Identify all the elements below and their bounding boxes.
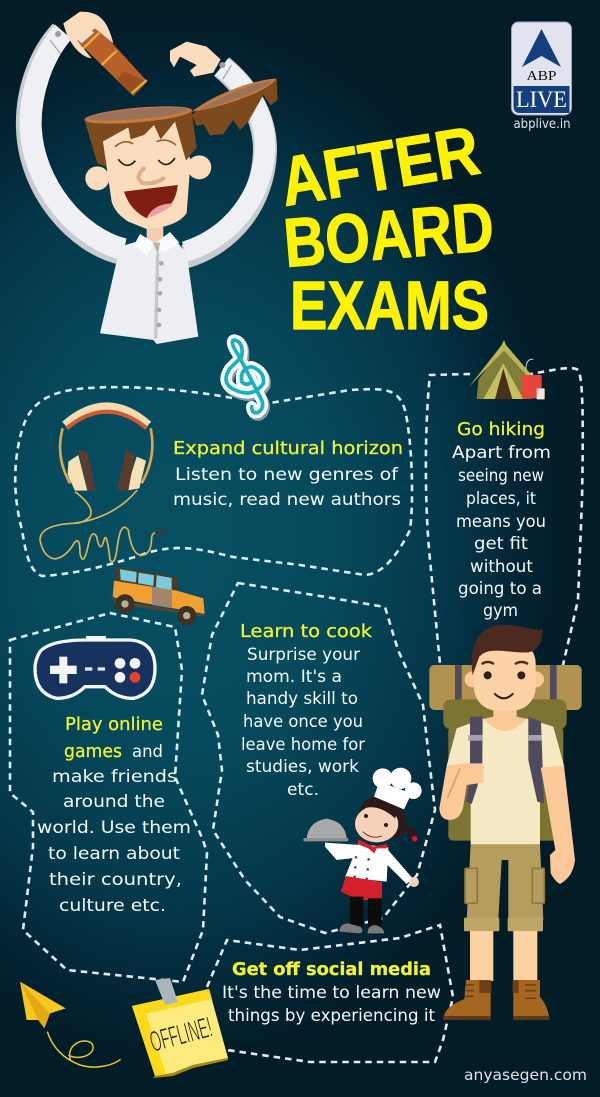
title: After Board Exams: AFTER	[275, 112, 485, 221]
text: learn to cook: Surprise your	[247, 645, 360, 664]
icon: tent with red bag	[468, 340, 545, 399]
dashed outline: online games panel	[10, 613, 207, 982]
book	[76, 27, 147, 96]
text: play online games: to learn about	[48, 844, 181, 863]
icon: headphones with cable	[40, 407, 167, 562]
text: play online games: Play online	[65, 715, 163, 735]
text: learn to cook: Learn to cook	[240, 622, 373, 642]
logo: ABP Live: LIVE	[516, 87, 567, 112]
hair flap	[192, 79, 278, 135]
text: expand cultural horizon: music, read new authors	[173, 490, 401, 509]
ears and head	[465, 671, 481, 687]
icon: paper plane with trail	[20, 982, 121, 1067]
sticky note: offline: OFFLINE!	[147, 1012, 216, 1059]
text: go hiking: without	[470, 557, 534, 576]
text: go hiking: means you	[456, 512, 546, 531]
title: After Board Exams: EXAMS	[290, 267, 489, 344]
eyebrows	[115, 140, 176, 147]
icon: treble clef	[226, 340, 265, 415]
text: learn to cook	[240, 622, 373, 799]
text: learn to cook: etc.	[287, 780, 319, 799]
chef hat	[373, 768, 422, 809]
text: learn to cook: studies, work	[246, 757, 359, 776]
cuffs	[55, 31, 61, 37]
arms	[28, 32, 265, 257]
arms	[439, 763, 484, 820]
shorts	[467, 844, 543, 920]
right hand	[170, 42, 221, 77]
nose	[138, 168, 163, 183]
text: get off social media: Get off social media	[232, 960, 431, 980]
text: expand cultural horizon	[173, 439, 403, 509]
illustration: man pouring book into open head	[28, 12, 278, 344]
text: play online games	[37, 715, 191, 915]
title: After Board Exams: BOARD	[281, 188, 497, 282]
face	[102, 120, 191, 229]
hair	[85, 109, 197, 167]
cloche	[307, 819, 347, 838]
credit: anyasegen.com: anyasegen.com	[464, 1066, 587, 1084]
shirt	[447, 718, 564, 845]
text: go hiking: seeing new	[458, 466, 544, 485]
logo: ABP Live	[512, 22, 572, 132]
hand holding book	[63, 12, 113, 58]
text: get off social media: things by experiencing it	[228, 1006, 436, 1025]
text: play online games: games	[64, 742, 122, 762]
text: learn to cook: have once you	[243, 712, 363, 731]
dashed outline: cultural horizon panel	[15, 387, 412, 576]
ears	[85, 166, 109, 190]
legs	[470, 931, 493, 981]
icon: game controller	[35, 636, 155, 698]
text: play online games: and	[132, 742, 163, 761]
dashed outline: social media panel	[207, 925, 453, 1062]
neck	[147, 223, 163, 243]
text: learn to cook: mom. It's a	[246, 667, 342, 686]
text: expand cultural horizon: Expand cultural horizon	[173, 439, 403, 459]
closed eyes	[118, 158, 175, 165]
jacket	[345, 844, 388, 882]
illustration: hiker with backpack	[429, 625, 582, 1020]
dashed outline: cooking panel	[202, 583, 435, 933]
sticky note: offline	[132, 978, 228, 1078]
text: go hiking: Apart from	[452, 443, 551, 462]
shirt	[100, 242, 198, 344]
text: go hiking: places, it	[466, 489, 536, 508]
icon: chef girl with cloche	[303, 768, 422, 933]
text: go hiking: going to a	[458, 579, 542, 598]
neck	[478, 703, 532, 740]
text: play online games: around the	[63, 792, 165, 811]
hair	[472, 625, 543, 675]
text: play online games: culture etc.	[59, 896, 166, 915]
text: play online games: make friends	[52, 767, 177, 786]
text: play online games: their country,	[49, 870, 182, 889]
text: go hiking: Go hiking	[457, 420, 545, 440]
text: expand cultural horizon: Listen to new genres of	[175, 465, 399, 484]
text: play online games: world. Use them	[37, 818, 191, 837]
text: go hiking: get fit	[474, 534, 529, 553]
text: get off social media: It's the time to learn new	[222, 983, 441, 1002]
text: get off social media	[222, 960, 441, 1025]
text: go hiking	[452, 420, 551, 620]
text: go hiking: gym	[483, 601, 518, 620]
text: learn to cook: handy skill to	[246, 689, 358, 708]
boots	[443, 980, 491, 1019]
dashed outline: hiking panel	[426, 368, 583, 665]
collar	[134, 232, 179, 256]
title: After Board Exams	[275, 112, 497, 344]
logo: ABP Live: ABP	[526, 68, 556, 83]
backpack straps	[466, 717, 483, 804]
logo: ABP Live: abplive.in	[514, 116, 570, 132]
text: learn to cook: leave home for	[241, 735, 365, 754]
mouth	[124, 185, 178, 218]
icon: off-road car	[110, 567, 205, 625]
